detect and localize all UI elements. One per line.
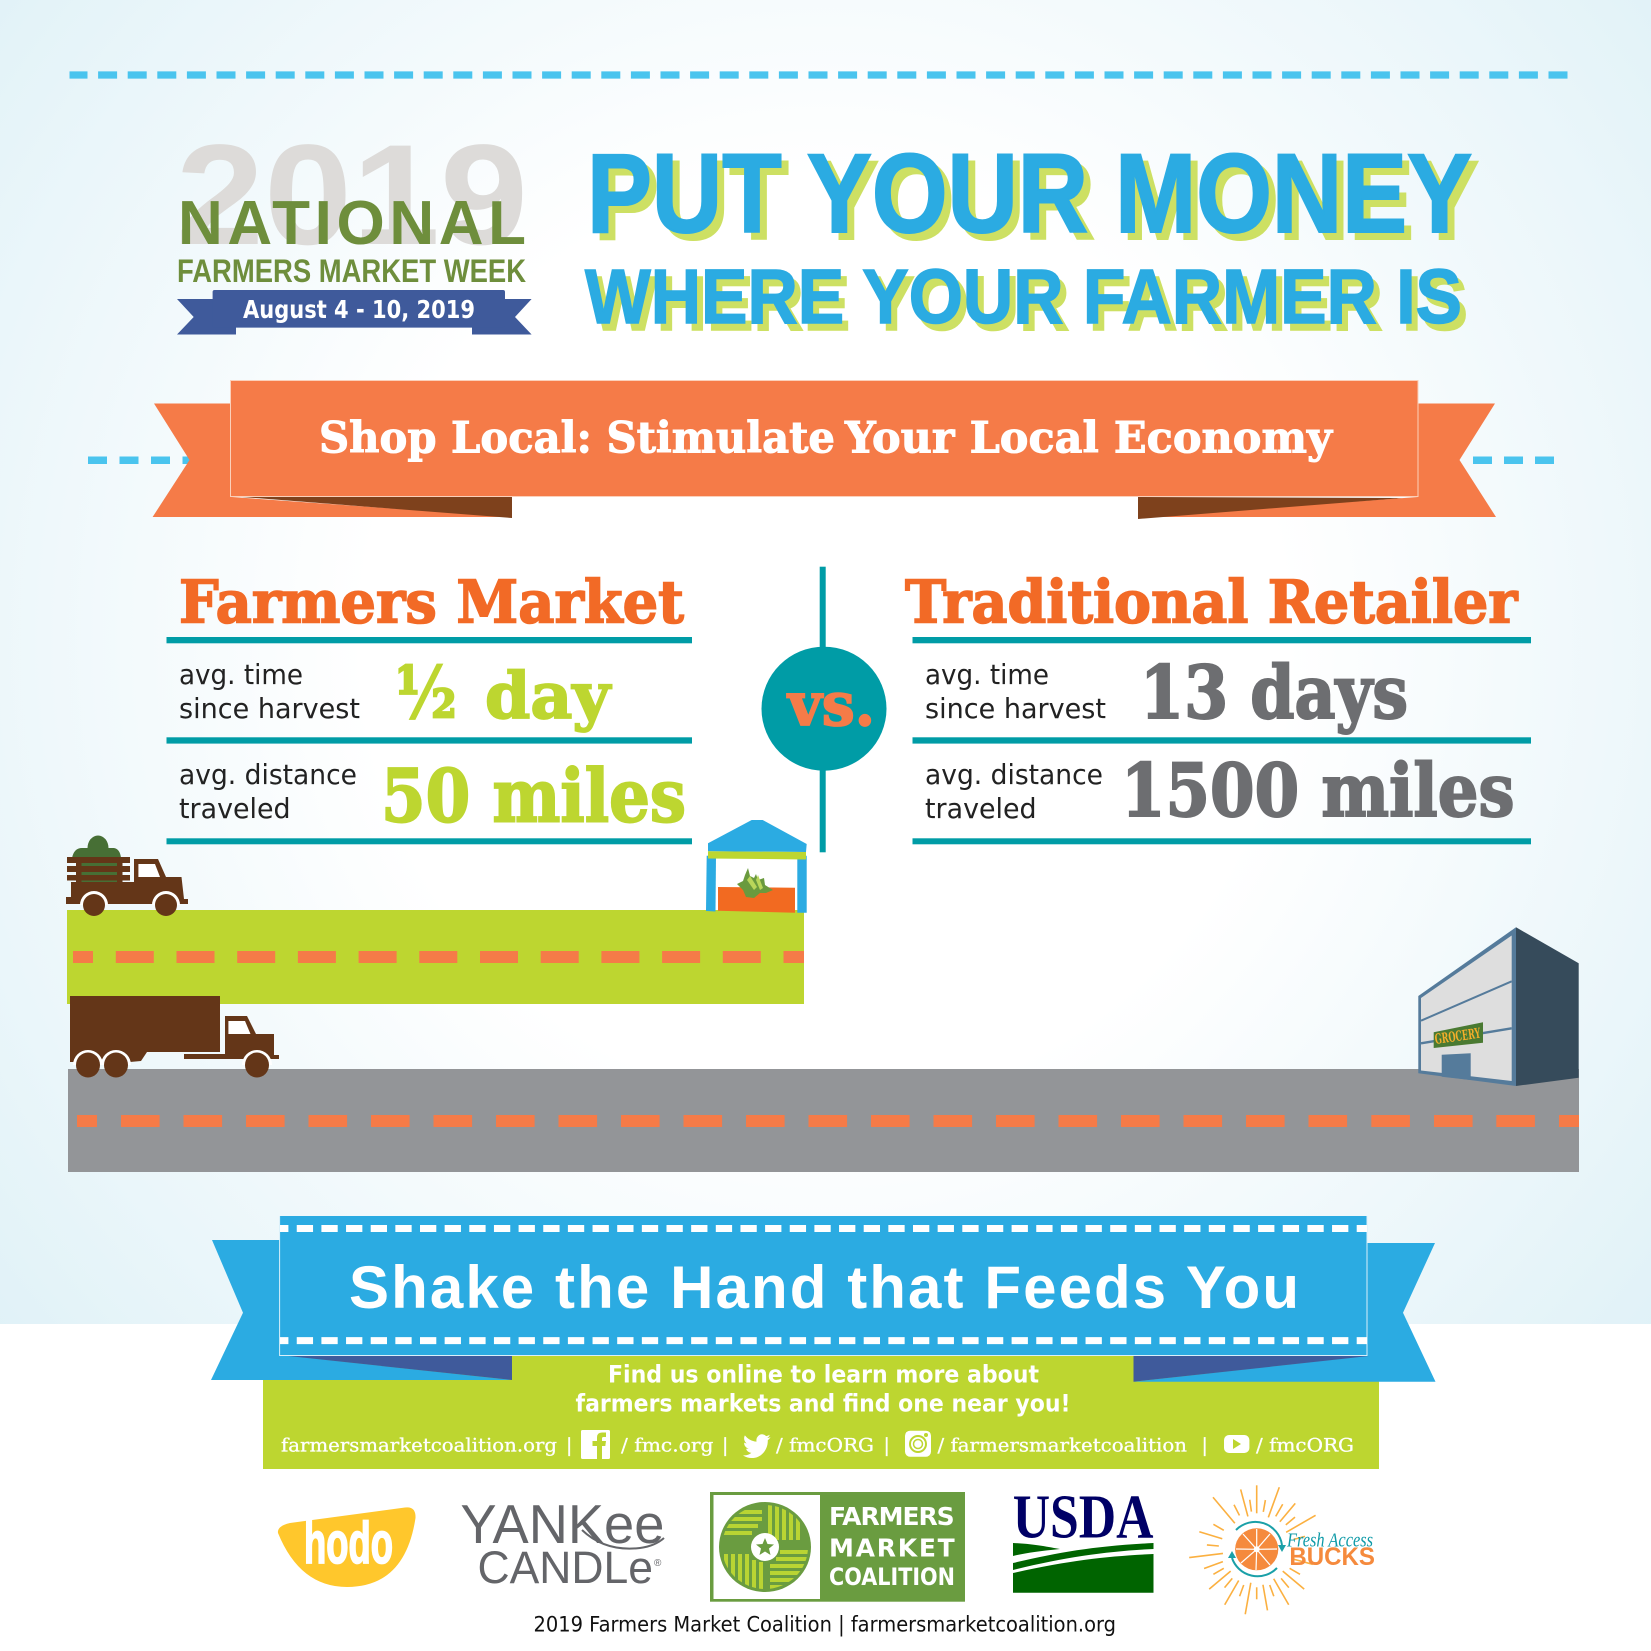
half day value: day <box>485 659 612 734</box>
fresh access bucks wordmark <box>1286 1530 1375 1571</box>
text: find us online: farmers markets and find one near you! <box>576 1390 1070 1418</box>
icon: grocery store <box>1418 927 1579 1086</box>
icon: facebook <box>581 1430 610 1459</box>
headline: WHERE YOUR FARMER IS <box>585 254 1462 340</box>
distance traveled label: traveled <box>179 793 291 825</box>
icon: delivery truck <box>70 996 279 1078</box>
time since harvest label retailer: since harvest <box>925 693 1106 725</box>
heading traditional retailer: Traditional Retailer <box>905 567 1518 636</box>
versus divider: vs. <box>786 670 875 740</box>
distance traveled label retailer: avg. distance <box>925 759 1103 791</box>
versus divider <box>762 567 886 852</box>
green road <box>67 910 804 1004</box>
time since harvest label <box>179 659 360 725</box>
text: find us online <box>576 1361 1070 1418</box>
headline: PUT YOUR MONEY <box>594 138 1479 263</box>
distance traveled label <box>179 759 357 825</box>
social links row: | <box>566 1435 572 1457</box>
fresh access bucks wordmark: BUCKS <box>1289 1543 1375 1571</box>
social links row: | <box>722 1435 728 1457</box>
icon: grocery store: GROCERY <box>1434 1026 1482 1048</box>
blue ribbon banner: Shake the Hand that Feeds You <box>349 1254 1299 1321</box>
logo: usda: USDA <box>1013 1483 1154 1551</box>
text: find us online: Find us online to learn more about <box>608 1361 1039 1389</box>
icon: youtube <box>1224 1435 1249 1453</box>
logo: yankee candle: ® <box>654 1558 662 1569</box>
headline: PUT YOUR MONEY <box>587 131 1472 256</box>
fmc wordmark: COALITION <box>829 1563 955 1591</box>
logo: yankee candle: YANKee <box>460 1493 664 1555</box>
orange ribbon banner: Shop Local: Stimulate <box>319 414 835 464</box>
icon: pickup truck with produce <box>66 836 188 916</box>
distance traveled label retailer: traveled <box>925 793 1037 825</box>
logo: usda <box>1013 1483 1154 1593</box>
social links row: | <box>884 1435 890 1457</box>
fmc wordmark <box>829 1502 955 1591</box>
orange ribbon banner <box>153 380 1496 519</box>
logo: hodo: hodo <box>304 1511 393 1576</box>
headline <box>585 131 1479 347</box>
social links row: / farmersmarketcoalition <box>938 1435 1187 1457</box>
date ribbon: August 4 - 10, 2019 <box>243 295 475 324</box>
time since harvest label: since harvest <box>179 693 360 725</box>
social links row: / fmc.org <box>621 1435 714 1457</box>
social links row: farmersmarketcoalition.org <box>281 1435 557 1457</box>
logo: yankee candle: CANDLe <box>478 1542 653 1593</box>
citrus <box>1235 1528 1278 1570</box>
green info panel <box>263 1355 1379 1469</box>
time since harvest label: avg. time <box>179 659 303 691</box>
sun rays <box>1189 1485 1316 1614</box>
fmc wordmark: MARKET <box>829 1534 955 1563</box>
13 days value: 13 days <box>1140 650 1408 736</box>
date ribbon <box>177 290 532 334</box>
icon: instagram <box>905 1431 931 1457</box>
social links row <box>281 1430 1354 1459</box>
headline: WHERE YOUR FARMER IS <box>591 261 1468 347</box>
logo: farmers market coalition <box>710 1492 965 1602</box>
icon: market stall <box>706 820 807 913</box>
1500 miles value: 1500 miles <box>1121 748 1514 834</box>
circular arrows <box>1228 1522 1286 1576</box>
footer credit: 2019 Farmers Market Coalition | farmersmarketcoalition.org <box>534 1613 1116 1638</box>
social links row: | <box>1202 1435 1208 1457</box>
50 miles value: 50 miles <box>381 754 686 840</box>
orange ribbon banner: Your Local Economy <box>844 414 1334 464</box>
social links row: / fmcORG <box>776 1435 874 1457</box>
top dashed line <box>70 71 1568 79</box>
panel: traditional retailer <box>905 567 1531 844</box>
logo: yankee candle <box>460 1493 664 1593</box>
heading farmers market: Farmers Market <box>179 567 684 636</box>
logo: fresh access bucks <box>1189 1485 1375 1614</box>
year 2019: 2019 <box>176 116 528 275</box>
icon: produce <box>737 868 773 898</box>
fresh access bucks wordmark: Fresh Access <box>1286 1530 1373 1552</box>
distance traveled label retailer <box>925 759 1103 825</box>
icon: twitter <box>743 1434 771 1458</box>
Farmers Market Week: FARMERS MARKET WEEK <box>177 253 526 289</box>
gray road <box>68 1069 1579 1172</box>
logo: 2019 National Farmers Market Week <box>176 116 532 334</box>
half day value <box>395 650 612 735</box>
logo: fmc emblem <box>719 1502 811 1592</box>
distance traveled label: avg. distance <box>179 759 357 791</box>
time since harvest label retailer <box>925 659 1106 725</box>
social links row: / fmcORG <box>1256 1435 1354 1457</box>
half day value: ½ <box>395 650 457 735</box>
side dashes beside orange banner <box>88 456 1554 464</box>
panel: farmers market <box>166 567 692 844</box>
logo: hodo <box>278 1507 416 1587</box>
fmc wordmark: FARMERS <box>829 1502 955 1531</box>
time since harvest label retailer: avg. time <box>925 659 1049 691</box>
word National: NATIONAL <box>178 189 526 258</box>
blue ribbon banner <box>211 1216 1436 1382</box>
